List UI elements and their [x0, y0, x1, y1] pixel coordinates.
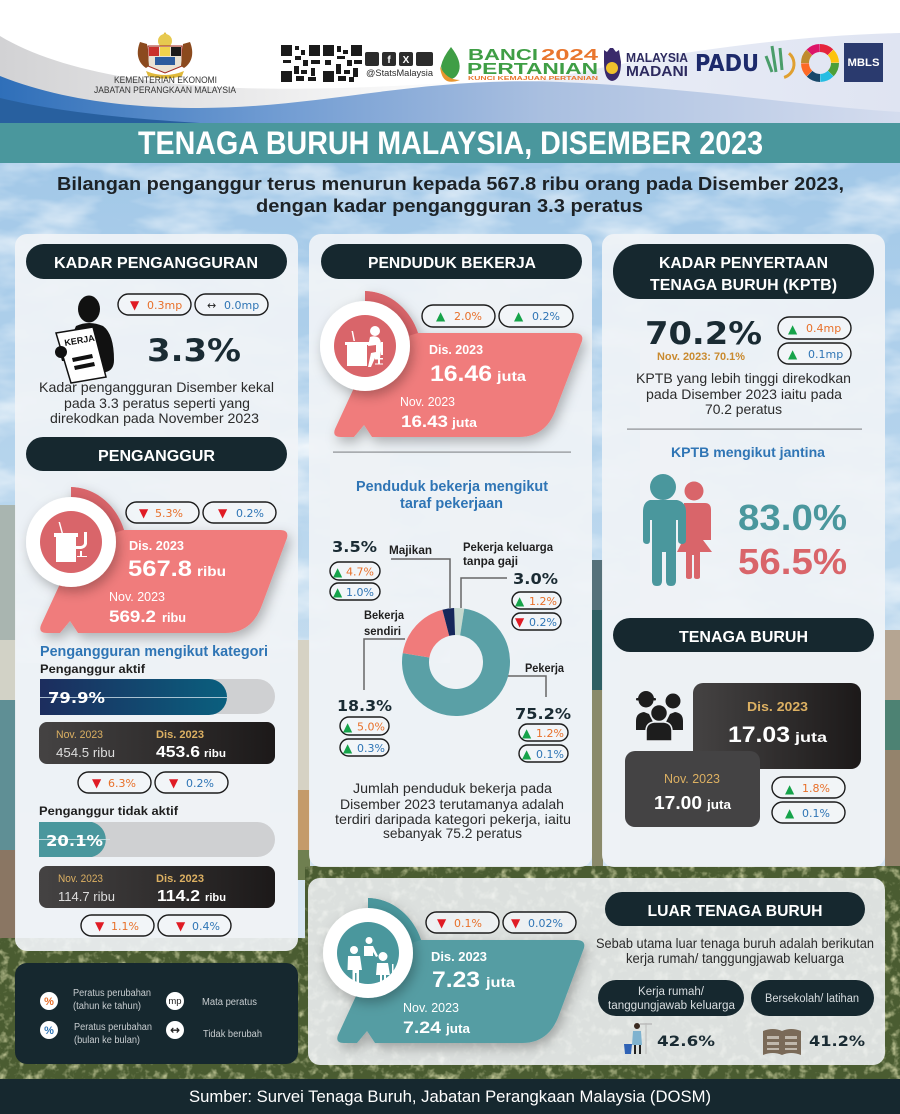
change pill: 0.4mp up: 0.4mp [806, 322, 841, 335]
box: inactive Nov and Dis values [39, 866, 275, 908]
logo: SDG wheel [799, 42, 841, 84]
logo: Banci Pertanian 2024: BANCI [468, 47, 538, 64]
box: active Nov and Dis values: Nov. 2023 [56, 729, 103, 741]
ribbon: employed: Dis. 2023 [429, 343, 483, 357]
change pill: 0.0mp unchanged: ↔ [207, 299, 216, 312]
change pill: 5.3% down: 5.3% [155, 507, 183, 520]
text: unemployment note: direkodkan pada November 2023 [50, 410, 259, 426]
logo: Banci Pertanian 2024: 2024 [541, 47, 598, 64]
icon: person at desk [345, 326, 383, 367]
donut label: majikan [330, 538, 432, 600]
heading: luar tenaga buruh: LUAR TENAGA BURUH [648, 903, 822, 920]
change pill: 0.2% down: ▼ [218, 506, 228, 520]
icon: cleaner [624, 1023, 652, 1054]
change pill: 0.1% down: ▼ [437, 916, 447, 930]
donut label: bekerja sendiri: 18.3% [337, 697, 392, 715]
ribbon: outside labour force [323, 898, 584, 1043]
previous value: Nov. 2023: 70.1% [657, 351, 745, 363]
donut label: pekerja: ▲ [522, 726, 532, 740]
value: 41.2%: 41.2% [809, 1034, 865, 1050]
box: Dis 2023 labour force: 17.03 [728, 722, 790, 747]
legend item: monthly change [40, 1021, 152, 1046]
footer: source: Sumber: Survei Tenaga Buruh, Jabatan Perangkaan Malaysia (DOSM) [189, 1088, 711, 1106]
legend item: unchanged: Tidak berubah [203, 1029, 262, 1040]
logo: Banci Pertanian 2024: PERTANIAN [467, 61, 598, 78]
box: active Nov and Dis values: Dis. 2023 [156, 729, 204, 741]
value: 3.3%: 3.3% [147, 333, 241, 369]
legend item: monthly change: % [44, 1025, 54, 1037]
bar: inactive 20.1% [39, 822, 275, 857]
donut label: bekerja sendiri [337, 608, 404, 756]
heading: luar tenaga buruh [605, 892, 865, 926]
change pill: 6.3% down [78, 772, 151, 793]
value: 42.6%: 42.6% [657, 1034, 715, 1050]
donut label: majikan: ▲ [333, 585, 343, 599]
change pill: 0.2% down: 0.2% [186, 777, 214, 790]
box: Dis 2023 labour force: juta [794, 729, 827, 745]
change pill: 0.4mp up: ▲ [788, 322, 798, 336]
icon: QR codes [281, 45, 362, 82]
legend item: monthly change: Peratus perubahan [74, 1022, 152, 1033]
text: employed note: terdiri daripada kategori pekerja, iaitu [335, 811, 571, 827]
text: main reasons: Sebab utama luar tenaga buruh adalah berikutan [596, 935, 874, 951]
legend item: percentage points [166, 992, 257, 1010]
heading: KPTB by gender: KPTB mengikut jantina [671, 444, 825, 460]
change pill: 0.1% up: 0.1% [802, 807, 830, 820]
donut label: bekerja sendiri: Bekerja [364, 608, 404, 622]
reason pill: housework [598, 980, 744, 1016]
heading: by category: Pengangguran mengikut kategori [40, 644, 268, 660]
box: Dis 2023 labour force: Dis. 2023 [747, 699, 808, 714]
social handle: @StatsMalaysia [366, 68, 433, 78]
legend item: unchanged: ↔ [170, 1023, 180, 1037]
change pill: 0.0mp unchanged [195, 294, 268, 315]
ministry name: JABATAN PERANGKAAN MALAYSIA [94, 85, 236, 95]
change pill: 1.8% up: 1.8% [802, 782, 830, 795]
change pill: 0.1% down [426, 912, 499, 933]
legend item: yearly change: % [44, 996, 54, 1008]
box: inactive Nov and Dis values: ribu [205, 892, 226, 904]
donut label: bekerja sendiri: ▲ [343, 741, 353, 755]
donut label: pekerja: 75.2% [515, 705, 571, 723]
donut label: pekerja keluarga [463, 540, 561, 630]
icon: workers [636, 691, 683, 741]
change pill: 0.1% down: 0.1% [454, 917, 482, 930]
reason pill: housework: Kerja rumah/ [638, 986, 705, 998]
donut label: pekerja keluarga: ▼ [515, 615, 525, 629]
box: active Nov and Dis values [39, 722, 275, 764]
donut label: bekerja sendiri: 5.0% [357, 720, 385, 734]
footer: source [0, 1079, 900, 1114]
donut label: bekerja sendiri: sendiri [364, 624, 401, 638]
label: inactive unemployed: Penganggur tidak aktif [39, 804, 179, 818]
logo: MBLS [844, 43, 883, 82]
heading: by employment status: Penduduk bekerja mengikut [356, 479, 548, 495]
heading: by employment status: taraf pekerjaan [400, 496, 503, 512]
heading: KPTB: KADAR PENYERTAAN [659, 255, 828, 272]
donut label: majikan: 4.7% [346, 566, 374, 578]
heading: tenaga buruh: TENAGA BURUH [679, 629, 808, 646]
heading: penganggur [26, 437, 287, 471]
change pill: 0.1% up: ▲ [785, 806, 795, 820]
social handle: f [387, 55, 391, 66]
change pill: 0.02% down [503, 912, 576, 933]
logo: Malaysia Madani: MADANI [626, 63, 688, 80]
text: KPTB note: 70.2 peratus [705, 401, 782, 417]
change pill: 2.0% up: ▲ [436, 309, 446, 323]
ribbon: outside labour force: Dis. 2023 [431, 950, 487, 964]
ribbon: penganggur: ribu [197, 563, 226, 579]
ribbon: employed: Nov. 2023 [400, 395, 455, 409]
ribbon: penganggur: Dis. 2023 [129, 539, 184, 553]
text: employed note [335, 780, 571, 841]
box: inactive Nov and Dis values: Dis. 2023 [156, 873, 204, 885]
heading: penduduk bekerja: PENDUDUK BEKERJA [368, 255, 536, 272]
ribbon: outside labour force: 7.24 [403, 1018, 442, 1037]
value: male rate: 83.0% [738, 497, 847, 538]
legend item: percentage points: Mata peratus [202, 997, 257, 1008]
change pill: 1.1% down: 1.1% [111, 920, 139, 933]
change pill: 5.3% down: ▼ [139, 506, 149, 520]
box: active Nov and Dis values: 454.5 ribu [56, 746, 115, 760]
text: unemployment note: Kadar pengangguran Disember kekal [39, 379, 274, 395]
box: Nov 2023 labour force: Nov. 2023 [664, 771, 720, 786]
icon: open book [763, 1029, 801, 1055]
text: KPTB note: KPTB yang lebih tinggi direkodkan [636, 370, 851, 386]
text: employed note: sebanyak 75.2 peratus [383, 825, 522, 841]
ribbon: outside labour force: juta [485, 974, 515, 990]
ministry name [94, 75, 236, 95]
change pill: 1.8% up [772, 777, 845, 798]
donut label: majikan: 3.5% [332, 538, 377, 556]
legend item: yearly change [40, 988, 151, 1012]
change pill: 0.4% down: 0.4% [192, 920, 220, 933]
donut label: pekerja [515, 661, 571, 762]
change pill: 0.02% down: 0.02% [528, 917, 563, 930]
panel: legend [15, 963, 298, 1064]
change pill: 0.2% up: 0.2% [532, 310, 560, 323]
donut label: pekerja keluarga: Pekerja keluarga [463, 540, 553, 554]
box: Nov 2023 labour force [625, 751, 760, 827]
panel: labour force participation [602, 234, 885, 867]
subtitle: Bilangan penganggur terus menurun kepada 567.8 ribu orang pada Disember 2023, [57, 174, 844, 194]
box: Nov 2023 labour force: juta [706, 797, 732, 812]
icon: job seeker with KERJA sign: KERJA [64, 333, 96, 348]
change pill: 1.1% down [81, 915, 154, 936]
icon: woman [677, 482, 712, 579]
text: unemployment note [39, 379, 274, 426]
reason pill: schooling [751, 980, 874, 1016]
donut label: pekerja keluarga: ▲ [515, 594, 525, 608]
panel: unemployment [15, 234, 298, 951]
box: inactive Nov and Dis values: 114.7 ribu [58, 890, 115, 904]
change pill: 0.2% down: 0.2% [236, 507, 264, 520]
ribbon: penganggur: ribu [162, 610, 186, 625]
text: unemployment note: pada 3.3 peratus seperti yang [64, 395, 250, 411]
ribbon: penganggur [26, 487, 287, 633]
social handle: X [403, 55, 410, 66]
change pill: 0.1mp up: 0.1mp [808, 348, 843, 361]
change pill: 2.0% up [422, 305, 495, 327]
donut label: pekerja keluarga: tanpa gaji [463, 554, 518, 568]
heading: kadar pengangguran [26, 244, 287, 279]
ribbon: penganggur: 569.2 [109, 607, 156, 626]
donut label: bekerja sendiri: 0.3% [357, 742, 385, 755]
donut label: pekerja: 1.2% [536, 727, 564, 740]
change pill: 0.3mp down: ▼ [130, 298, 140, 312]
change pill: 0.2% down [155, 772, 228, 793]
change pill: 0.1mp up [778, 343, 851, 364]
change pill: 0.3mp down: 0.3mp [147, 299, 182, 312]
change pill: 6.3% down: 6.3% [108, 777, 136, 790]
change pill: 0.2% down [203, 502, 276, 523]
header band [0, 0, 900, 123]
logo: Malaysia Madani: MALAYSIA [626, 50, 689, 65]
donut chart: employment status [414, 620, 498, 704]
reason pill: schooling: Bersekolah/ latihan [765, 993, 859, 1005]
change pill: 1.1% down: ▼ [95, 919, 105, 933]
box: active Nov and Dis values: ribu [204, 748, 226, 760]
logo: PADU: PADU [695, 51, 759, 77]
bar: inactive 20.1%: 20.1% [46, 832, 103, 850]
change pill: 5.3% down [126, 502, 199, 523]
leader lines [364, 559, 546, 697]
change pill: 0.4mp up [778, 317, 851, 339]
ribbon: employed: 16.46 [430, 361, 492, 386]
reason pill: housework: tanggungjawab keluarga [608, 1000, 736, 1012]
logo: Malaysia Madani [604, 48, 689, 81]
legend item: percentage points: mp [168, 996, 182, 1007]
ribbon: employed: 16.43 [401, 412, 448, 431]
ribbon: employed: juta [496, 368, 526, 384]
social handle [365, 52, 433, 78]
box: inactive Nov and Dis values: Nov. 2023 [58, 873, 103, 885]
text: employed note: Jumlah penduduk bekerja pada [353, 780, 552, 796]
ribbon: outside labour force: 7.23 [432, 967, 480, 992]
ribbon: employed [320, 291, 582, 437]
ministry name: KEMENTERIAN EKONOMI [114, 75, 217, 85]
value: 70.2%: 70.2% [645, 316, 762, 352]
logo: Banci Pertanian 2024: KUNCI KEMAJUAN PERTANIAN [468, 76, 599, 82]
legend item: yearly change: Peratus perubahan [73, 988, 151, 999]
box: Nov 2023 labour force: 17.00 [654, 793, 702, 813]
title bar: TENAGA BURUH MALAYSIA, DISEMBER 2023 [138, 125, 763, 161]
logo: Banci Pertanian 2024 [440, 47, 599, 82]
icon: empty desk [54, 522, 87, 562]
ribbon: penganggur: Nov. 2023 [109, 590, 165, 604]
bar: active 79.9%: 79.9% [48, 689, 105, 707]
heading: kadar pengangguran: KADAR PENGANGGURAN [54, 255, 258, 272]
text: main reasons [596, 935, 874, 966]
change pill: 0.2% up: ▲ [514, 309, 524, 323]
value: female rate: 56.5% [738, 541, 847, 582]
text: employed note: Disember 2023 terutamanya adalah [340, 796, 564, 812]
donut label: majikan: ▲ [333, 565, 343, 579]
bar: active 79.9% [40, 679, 275, 715]
box: inactive Nov and Dis values: 114.2 [157, 888, 200, 905]
logo: MBLS: MBLS [848, 57, 880, 69]
change pill: 1.8% up: ▲ [785, 782, 795, 796]
box: Dis 2023 labour force [693, 683, 861, 769]
logo: leaf ring [760, 44, 800, 84]
change pill: 0.3mp down [118, 294, 191, 315]
ribbon: penganggur: 567.8 [128, 556, 192, 581]
panel: outside labour force [308, 878, 885, 1065]
ribbon: outside labour force: Nov. 2023 [403, 1001, 459, 1015]
ribbon: outside labour force: juta [445, 1021, 471, 1036]
donut label: pekerja: Pekerja [525, 661, 564, 675]
legend item: unchanged [166, 1021, 262, 1040]
change pill: 0.02% down: ▼ [511, 916, 521, 930]
donut label: pekerja keluarga: 1.2% [529, 595, 557, 608]
donut label: pekerja: 0.1% [536, 748, 564, 761]
change pill: 6.3% down: ▼ [92, 776, 102, 790]
donut label: pekerja: ▲ [522, 747, 532, 761]
heading: KPTB: TENAGA BURUH (KPTB) [650, 277, 837, 294]
icon: family [348, 937, 394, 983]
text: KPTB note [636, 370, 851, 417]
donut label: majikan: Majikan [389, 543, 432, 557]
change pill: 0.4% down: ▼ [176, 919, 186, 933]
donut label: pekerja keluarga: 3.0% [513, 570, 558, 588]
legend item: yearly change: (tahun ke tahun) [73, 1001, 141, 1012]
box: active Nov and Dis values: 453.6 [156, 744, 200, 761]
donut label: bekerja sendiri: ▲ [343, 720, 353, 734]
text: main reasons: kerja rumah/ tanggungjawab keluarga [626, 950, 844, 966]
donut label: pekerja keluarga: 0.2% [529, 616, 557, 629]
label: active unemployed: Penganggur aktif [40, 662, 146, 676]
heading: penduduk bekerja [321, 244, 582, 279]
icon: coat of arms [138, 32, 192, 78]
change pill: 0.2% up [499, 305, 573, 327]
change pill: 2.0% up: 2.0% [454, 310, 482, 323]
title bar [0, 123, 900, 163]
icon: job seeker with KERJA sign [55, 296, 114, 383]
legend item: monthly change: (bulan ke bulan) [74, 1035, 140, 1046]
heading: tenaga buruh [613, 618, 874, 652]
heading: by employment status [356, 479, 548, 512]
panel: employed persons [309, 234, 592, 867]
heading: KPTB [613, 244, 874, 299]
donut label: majikan: 1.0% [346, 586, 374, 599]
subtitle: dengan kadar pengangguran 3.3 peratus [256, 196, 643, 216]
change pill: 0.2% down: ▼ [169, 776, 179, 790]
text: KPTB note: pada Disember 2023 iaitu pada [646, 386, 842, 402]
heading: penganggur: PENGANGGUR [98, 448, 215, 465]
change pill: 0.4% down [158, 915, 231, 936]
change pill: 0.1mp up: ▲ [788, 347, 798, 361]
change pill: 0.1% up [772, 802, 845, 823]
ribbon: employed: juta [451, 415, 478, 430]
subtitle [57, 174, 844, 216]
icon: man [643, 474, 686, 586]
change pill: 0.0mp unchanged: 0.0mp [224, 299, 259, 312]
